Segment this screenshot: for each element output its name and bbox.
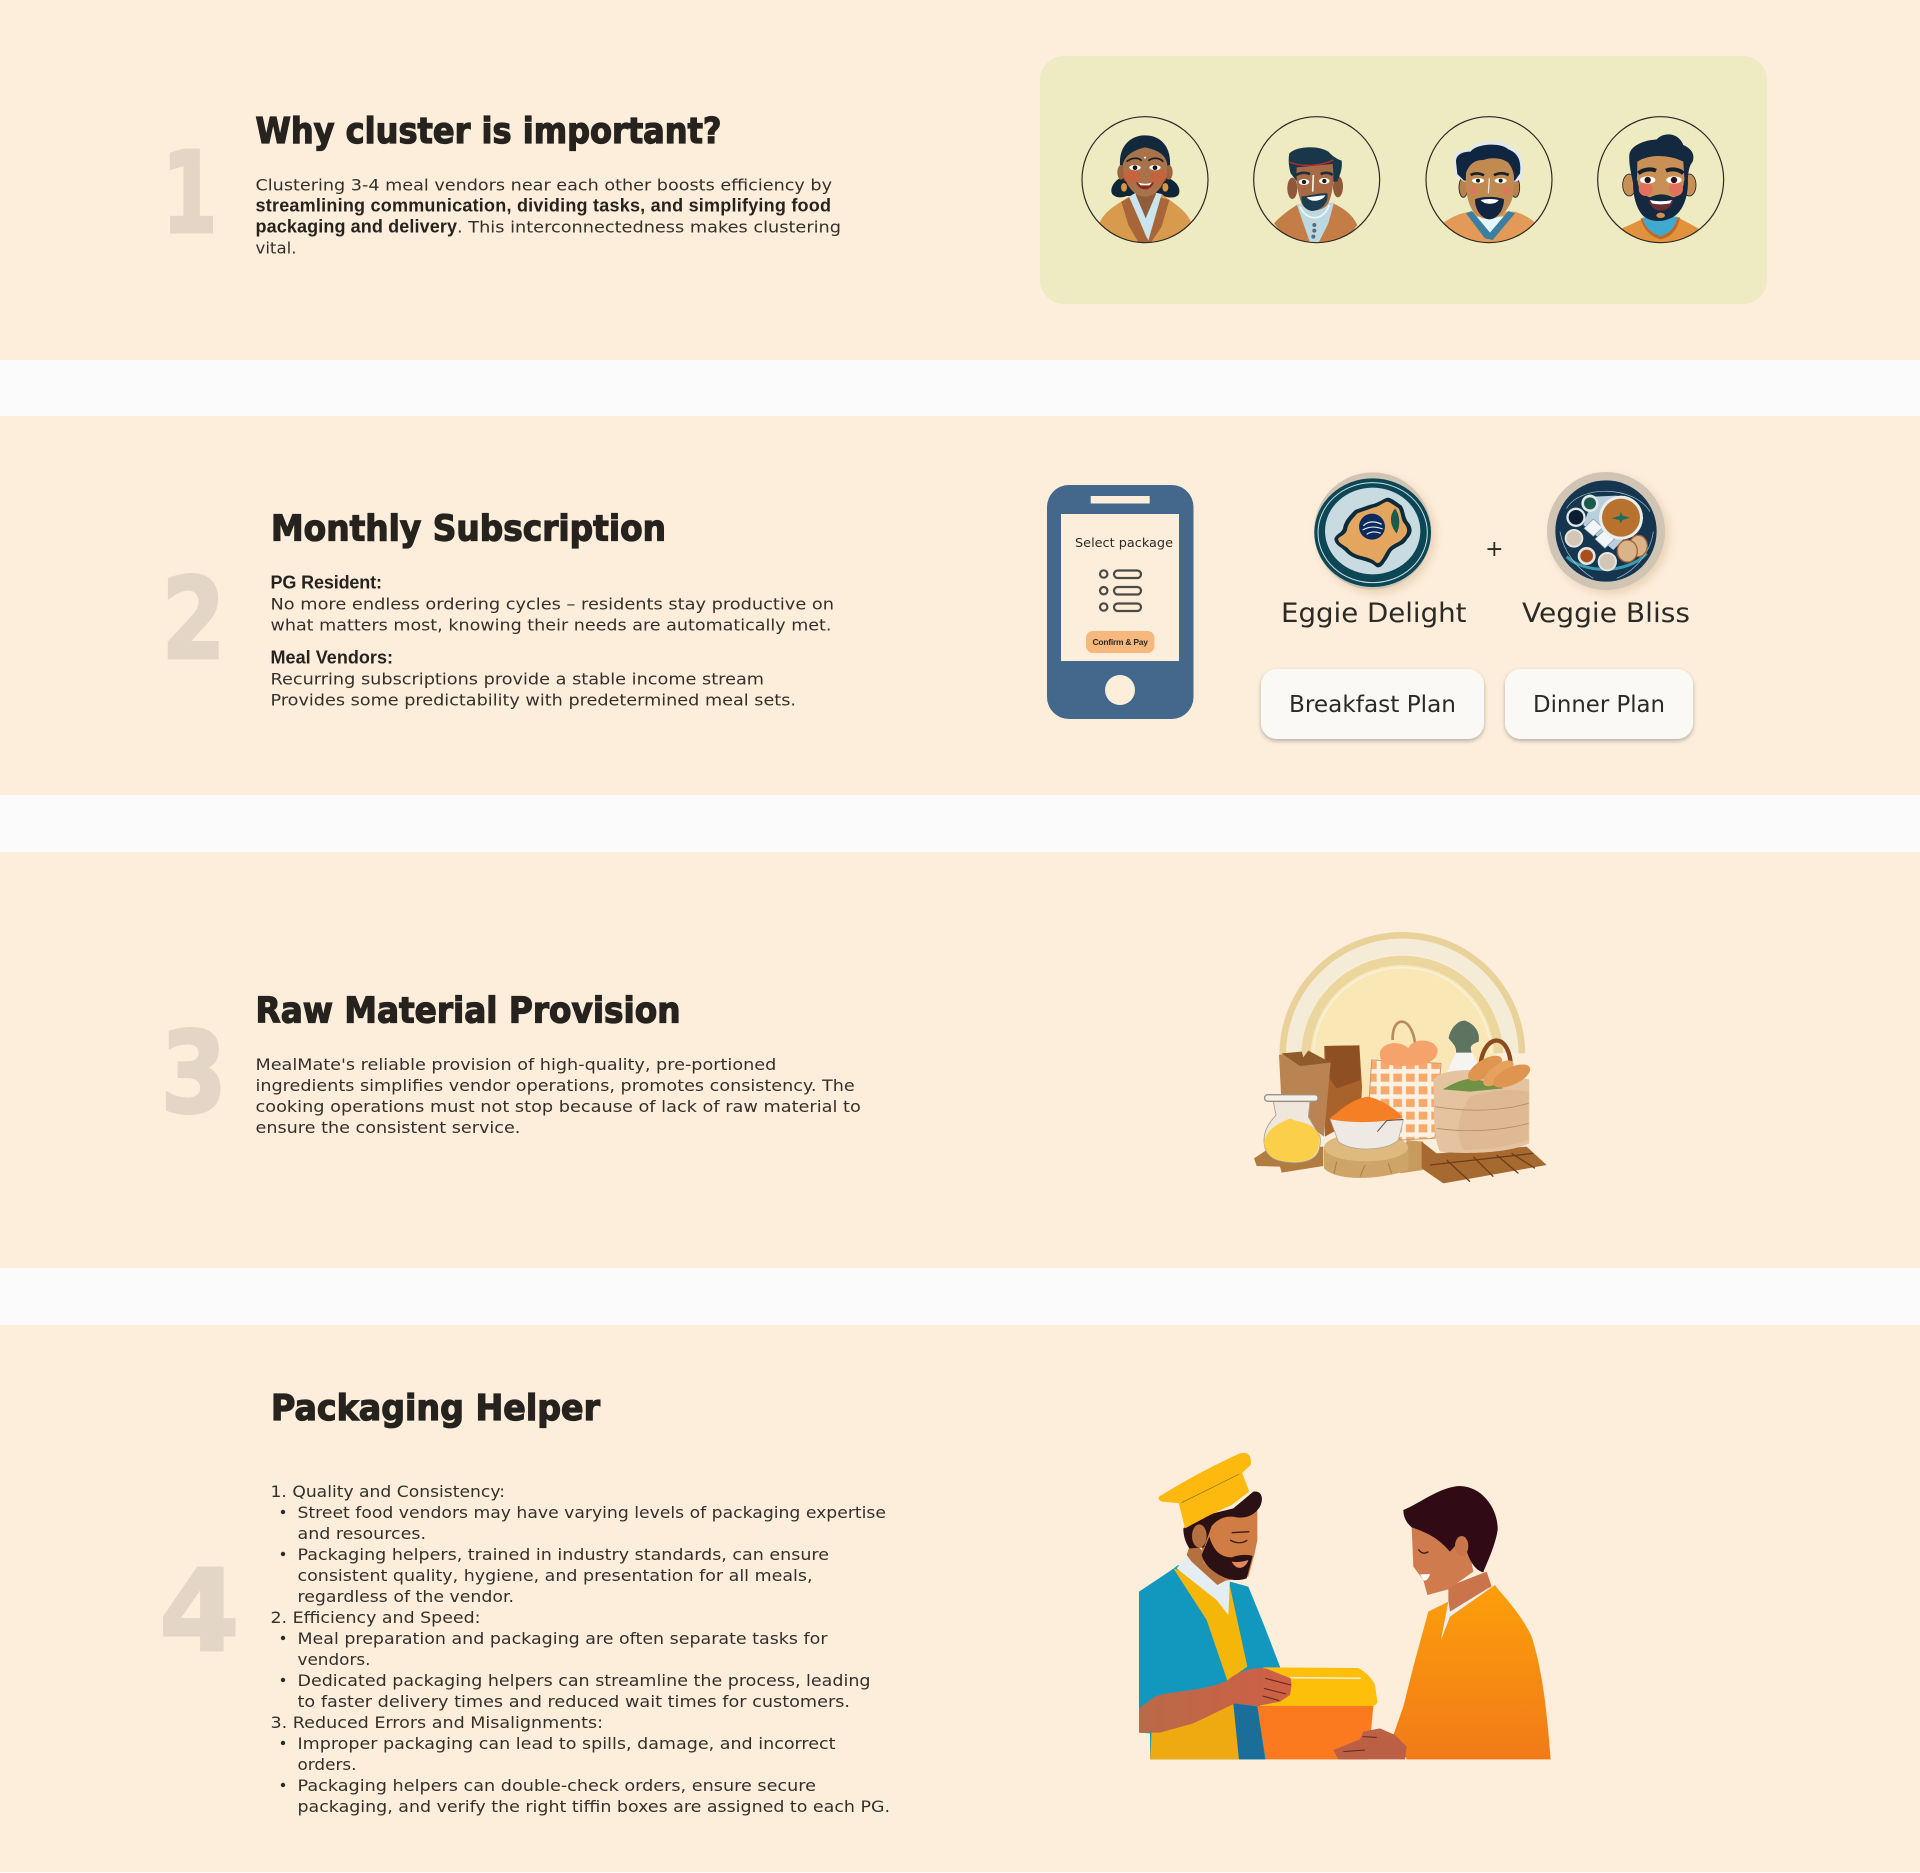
- checked basket with rolls: [1369, 1022, 1441, 1140]
- body text: raw material: MealMate's reliable provision of high-quality, pre-portioned: [256, 1055, 776, 1074]
- meal plates: [1314, 472, 1665, 590]
- crate base: [1422, 1142, 1547, 1183]
- body text: PG resident: what matters most, knowing their needs are automatically met.: [270, 615, 832, 634]
- step number 2: 2: [162, 555, 225, 685]
- body text: meal vendors: Meal Vendors:: [270, 647, 393, 667]
- body text: PG resident: PG Resident:: [270, 572, 382, 592]
- label: eggie delight: Eggie Delight: [1281, 598, 1466, 629]
- panel: packaging helper: [160, 1388, 1551, 1816]
- phone mockup: [1047, 485, 1194, 719]
- wooden tray left: [1254, 1147, 1323, 1173]
- section background: cluster: [0, 0, 1920, 360]
- heading: raw material provision: Raw Material Provision: [256, 991, 680, 1032]
- wood stump: [1324, 1133, 1423, 1178]
- body text: meal vendors: [270, 647, 796, 709]
- avatars: two bearded men: [1426, 117, 1724, 243]
- body text: cluster: Clustering 3-4 meal vendors near each other boosts efficiency by: [256, 176, 832, 195]
- panel: monthly subscription: [162, 472, 1693, 739]
- numbered list of packaging benefits: and resources.: [298, 1524, 426, 1543]
- plate: eggie delight: [1314, 472, 1431, 590]
- sun arch: [1283, 935, 1522, 1097]
- numbered list of packaging benefits: 3. Reduced Errors and Misalignments:: [270, 1713, 603, 1732]
- avatars: woman and man: [1082, 117, 1380, 245]
- plus sign: +: [1485, 537, 1504, 562]
- numbered list of packaging benefits: regardless of the vendor.: [298, 1587, 514, 1606]
- jar of yellow grains: [1264, 1095, 1320, 1163]
- phone mockup: Select package: [1075, 536, 1173, 550]
- body text: cluster: vital.: [256, 239, 296, 258]
- body text: raw material: cooking operations must not stop because of lack of raw material to: [256, 1097, 861, 1116]
- package option list: [1100, 570, 1141, 611]
- avatar: woman vendor: [1082, 117, 1208, 245]
- button: breakfast plan: [1261, 669, 1484, 739]
- confirm and pay button: Confirm & Pay: [1092, 637, 1148, 647]
- body text: cluster: streamlining communication, dividing tasks, and simplifying food: [256, 196, 831, 216]
- illustration: groceries under arch: [1254, 935, 1547, 1183]
- tiffin box: [1257, 1667, 1377, 1759]
- body text: raw material: ingredients simplifies vendor operations, promotes consistency. The: [256, 1076, 855, 1095]
- numbered list of packaging benefits: Packaging helpers can double-check orders, ensure secure: [298, 1776, 816, 1795]
- body text: meal vendors: Recurring subscriptions provide a stable income stream: [270, 669, 764, 688]
- sack with greens and bread: [1433, 1041, 1533, 1153]
- packaging helper chef: [1139, 1453, 1280, 1759]
- numbered list of packaging benefits: Street food vendors may have varying levels of packaging expertise: [298, 1503, 886, 1522]
- body text: cluster: packaging and delivery: [256, 217, 457, 237]
- numbered list of packaging benefits: 1. Quality and Consistency:: [270, 1482, 505, 1501]
- numbered list of packaging benefits: orders.: [298, 1755, 356, 1774]
- section background: subscription: [0, 416, 1920, 795]
- step number 1: 1: [162, 129, 218, 259]
- bottle with green cap: [1447, 1021, 1481, 1080]
- panel: why cluster is important: [162, 56, 1767, 304]
- body text: cluster: [256, 176, 841, 258]
- vendor avatars panel: [1040, 56, 1767, 304]
- avatar: man with red hair band: [1254, 117, 1380, 243]
- plate: veggie bliss: [1547, 472, 1665, 590]
- button: breakfast plan: Breakfast Plan: [1289, 692, 1456, 718]
- section background: raw material: [0, 852, 1920, 1268]
- numbered list of packaging benefits: Improper packaging can lead to spills, damage, and incorrect: [298, 1734, 836, 1753]
- section background: packaging: [0, 1325, 1920, 1872]
- button: dinner plan: Dinner Plan: [1533, 692, 1665, 718]
- numbered list of packaging benefits: to faster delivery times and reduced wait times for customers.: [298, 1692, 850, 1711]
- numbered list of packaging benefits: 2. Efficiency and Speed:: [270, 1608, 480, 1627]
- confirm and pay button: [1086, 631, 1154, 653]
- numbered list of packaging benefits: consistent quality, hygiene, and presentation for all meals,: [298, 1566, 812, 1585]
- body text: cluster: . This interconnectedness makes clustering: [457, 218, 841, 237]
- body text: raw material: ensure the consistent service.: [256, 1118, 520, 1137]
- panel: raw material provision: [161, 935, 1547, 1183]
- numbered list of packaging benefits: Packaging helpers, trained in industry standards, can ensure: [298, 1545, 829, 1564]
- numbered list of packaging benefits: vendors.: [298, 1650, 370, 1669]
- body text: PG resident: [270, 572, 834, 634]
- paper bags: [1279, 1045, 1362, 1137]
- numbered list of packaging benefits: [270, 1482, 890, 1816]
- step number 4: 4: [160, 1547, 239, 1677]
- illustration: chef hands box to resident: [1139, 1453, 1551, 1759]
- numbered list of packaging benefits: Dedicated packaging helpers can streamline the process, leading: [298, 1671, 870, 1690]
- avatar: man with full beard and necklace: [1598, 117, 1724, 243]
- step number 3: 3: [161, 1009, 227, 1139]
- heading: why cluster: Why cluster is important?: [256, 111, 722, 152]
- body text: PG resident: No more endless ordering cycles – residents stay productive on: [270, 594, 834, 613]
- heading: packaging helper: Packaging Helper: [271, 1388, 600, 1429]
- chef arm and hand: [1139, 1668, 1292, 1733]
- numbered list of packaging benefits: Meal preparation and packaging are often separate tasks for: [298, 1629, 828, 1648]
- numbered list of packaging benefits: packaging, and verify the right tiffin boxes are assigned to each PG.: [298, 1797, 890, 1816]
- body text: raw material: [256, 1055, 861, 1137]
- body text: meal vendors: Provides some predictability with predetermined meal sets.: [270, 690, 796, 709]
- resident person: [1333, 1486, 1551, 1759]
- label: veggie bliss: Veggie Bliss: [1522, 598, 1690, 629]
- button: dinner plan: [1505, 669, 1693, 739]
- bowl of orange lentils: [1329, 1097, 1403, 1149]
- heading: monthly subscription: Monthly Subscription: [271, 509, 666, 550]
- avatar: man with curly hair: [1426, 117, 1552, 243]
